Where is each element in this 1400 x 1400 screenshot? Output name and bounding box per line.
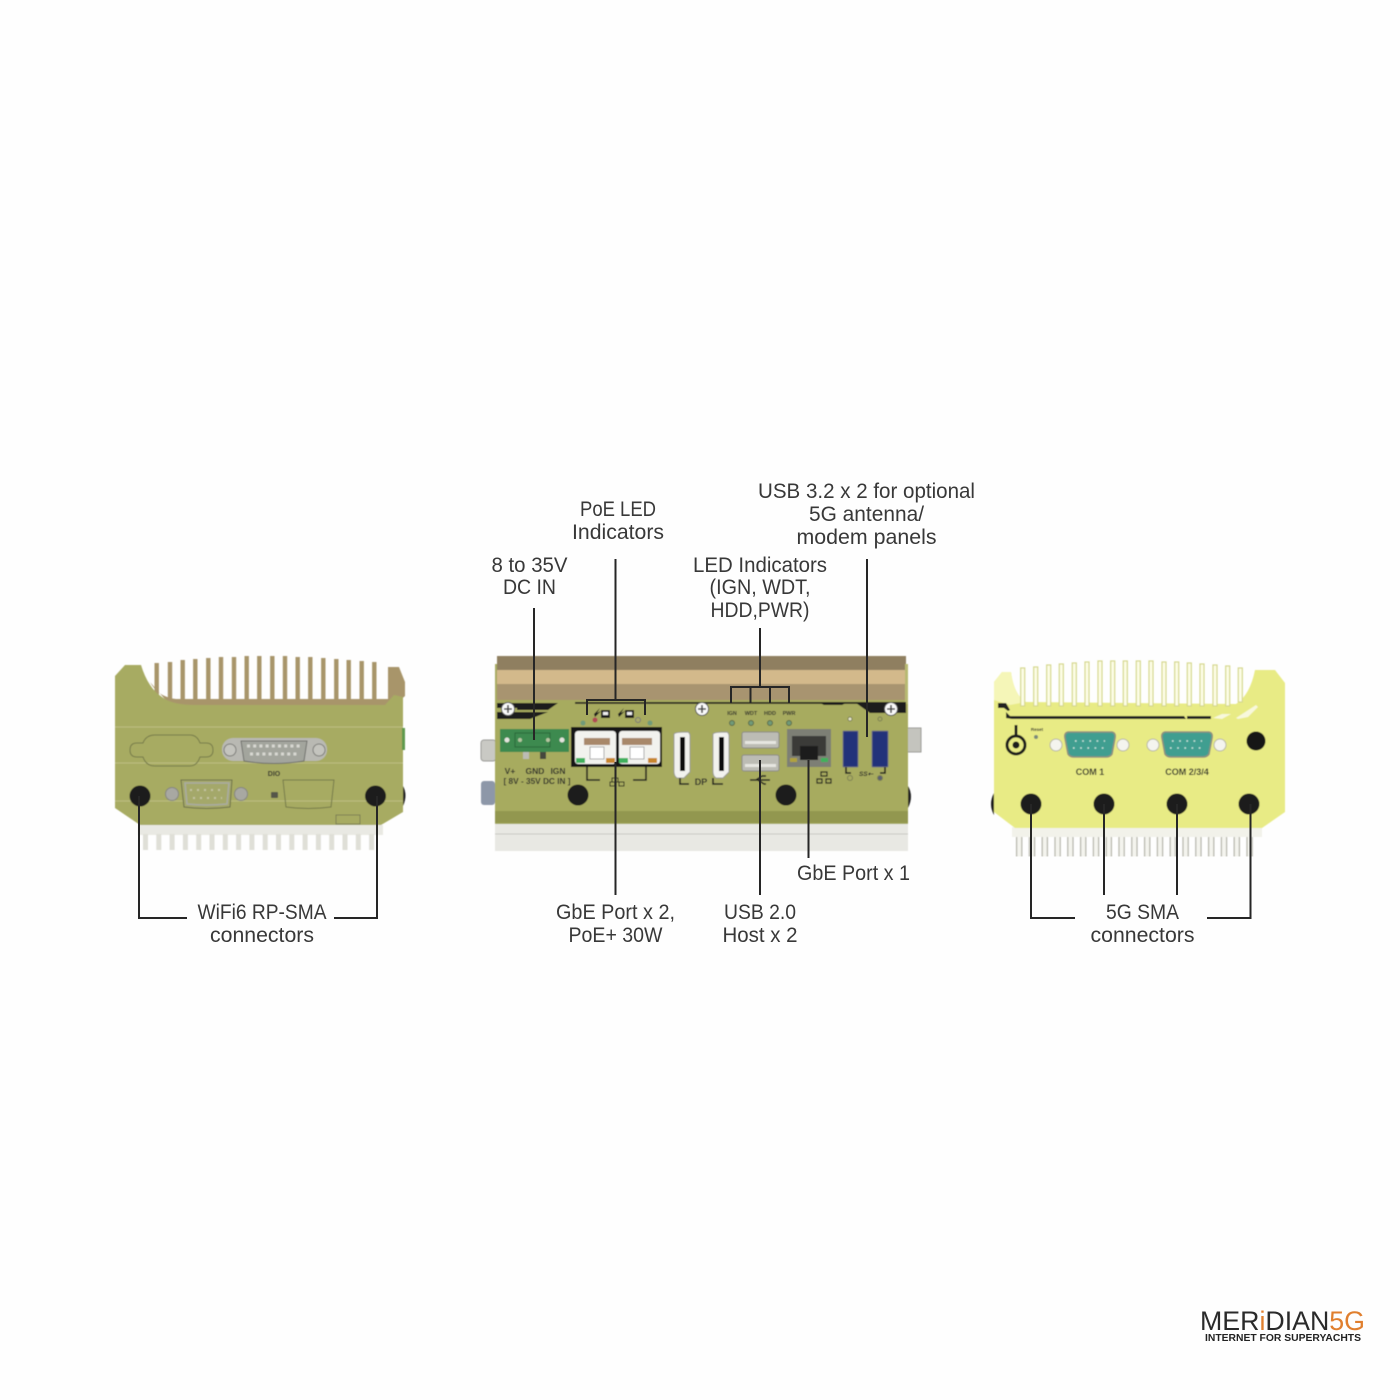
leader lines bbox=[139, 559, 1250, 918]
small switch bbox=[271, 792, 278, 798]
COM 1 label: COM 1 bbox=[1076, 767, 1104, 777]
network icon bbox=[817, 772, 831, 783]
screws bbox=[502, 702, 898, 716]
label: WiFi6 connectors: WiFi6 RP-SMA bbox=[198, 901, 326, 924]
side stubs bbox=[481, 728, 921, 808]
heat sink base and right shoulder bbox=[150, 667, 405, 705]
LED labels: PWR bbox=[783, 711, 795, 717]
top fins bbox=[1021, 661, 1242, 706]
label: LED Indicators: LED Indicators bbox=[693, 554, 827, 577]
top tan heat sink bands bbox=[497, 656, 906, 700]
DC labels: IGN bbox=[550, 766, 566, 776]
black stripe graphics bbox=[497, 702, 906, 719]
LED indicator dots bbox=[730, 720, 792, 726]
knockout: lower right serial outline bbox=[283, 780, 334, 808]
label: USB 3.2: modem panels bbox=[796, 526, 936, 549]
logo wordmark: MERiDIAN5G bbox=[1200, 1306, 1365, 1336]
knob left bbox=[568, 784, 588, 806]
center device: main I/O panel bbox=[481, 656, 921, 851]
logo bbox=[1200, 1306, 1365, 1344]
knob right bbox=[776, 784, 796, 806]
label: GbE Port x 2: PoE+ 30W bbox=[568, 924, 663, 947]
label: PoE LED Indicators: PoE LED bbox=[580, 498, 656, 521]
LED labels: IGN bbox=[727, 711, 737, 717]
antenna knob left bbox=[130, 786, 150, 806]
5G knobs bbox=[991, 793, 1260, 815]
label: USB 2.0: USB 2.0 bbox=[724, 901, 796, 924]
COM 1 connector bbox=[1050, 732, 1129, 757]
black button bbox=[1246, 732, 1266, 750]
DP bracket and label: DP bbox=[695, 777, 707, 787]
DC labels: [ 8V - 35V DC IN ] bbox=[504, 777, 571, 786]
faint body highlights bbox=[115, 727, 403, 801]
bottom fins bbox=[138, 825, 383, 842]
small slot bbox=[336, 815, 360, 824]
LED labels bbox=[727, 711, 795, 717]
dual GbE PoE ports bbox=[571, 727, 662, 767]
side knob bbox=[403, 786, 406, 806]
right device: front view with 5G connectors bbox=[991, 661, 1285, 847]
label: USB 3.2: 5G antenna/ bbox=[809, 503, 924, 526]
DC labels: V+ bbox=[505, 766, 515, 776]
DIO connector bbox=[222, 738, 327, 764]
label: DC input: DC IN bbox=[503, 576, 556, 599]
GbE port 1 bbox=[787, 729, 831, 767]
logo tagline: INTERNET FOR SUPERYACHTS bbox=[1205, 1333, 1361, 1344]
label: PoE LED Indicators: Indicators bbox=[572, 521, 664, 544]
label: DC input: 8 to 35V bbox=[492, 554, 568, 577]
USB 3.2 ports: SS⇠ bbox=[859, 771, 874, 778]
DC labels: GND bbox=[526, 766, 544, 776]
olive panel bbox=[495, 664, 908, 825]
power button icon bbox=[1007, 725, 1025, 754]
LED labels: WDT bbox=[745, 711, 758, 717]
reset label and dot bbox=[1031, 727, 1044, 739]
DIO label: DIO bbox=[268, 771, 281, 778]
USB 3.2 ports bbox=[843, 731, 888, 778]
label: LED Indicators: HDD,PWR) bbox=[710, 599, 810, 622]
body bbox=[994, 670, 1285, 828]
antenna knob right bbox=[365, 786, 386, 806]
label: WiFi6 connectors: connectors bbox=[210, 924, 314, 947]
DC labels bbox=[504, 766, 571, 786]
reset label and dot: Reset bbox=[1031, 727, 1044, 732]
bottom fins bbox=[1012, 827, 1262, 847]
small status dots bbox=[848, 717, 882, 780]
left device: rear view with WiFi6 connectors bbox=[115, 656, 406, 842]
label: 5G SMA connectors: 5G SMA bbox=[1106, 901, 1179, 924]
label: LED Indicators: (IGN, WDT, bbox=[710, 576, 810, 599]
knockout: upper serial outline bbox=[130, 735, 213, 766]
white stripe graphic bbox=[1213, 705, 1258, 719]
DisplayPort connector 1 bbox=[674, 732, 690, 778]
USB 2.0 ports bbox=[742, 732, 779, 771]
LED labels: HDD bbox=[764, 711, 776, 717]
black stripe bbox=[998, 703, 1211, 719]
pale top left highlight bbox=[994, 672, 1026, 705]
lower light band bbox=[495, 824, 908, 851]
side green terminal sliver bbox=[402, 728, 405, 750]
DP bracket and label bbox=[680, 777, 723, 787]
label: GbE Port x 1: GbE Port x 1 bbox=[797, 862, 910, 885]
body bbox=[115, 665, 403, 825]
label: 5G SMA connectors: connectors bbox=[1090, 924, 1194, 947]
heat sink fins top bbox=[157, 656, 374, 702]
COM 2/3/4 label: COM 2/3/4 bbox=[1165, 767, 1209, 777]
lower serial connector bbox=[166, 780, 248, 808]
PoE icons bbox=[594, 708, 634, 718]
PoE LED dots bbox=[580, 718, 652, 726]
COM 2/3/4 connector bbox=[1147, 732, 1226, 757]
GbE bracket and network icon bbox=[587, 767, 646, 786]
DC terminal block bbox=[500, 729, 569, 759]
label: GbE Port x 2: GbE Port x 2, bbox=[556, 901, 675, 924]
DisplayPort connector 2 bbox=[713, 732, 729, 778]
label: USB 3.2: USB 3.2 x 2 for optional bbox=[758, 480, 975, 503]
label: USB 2.0: Host x 2 bbox=[722, 924, 798, 947]
USB icon bbox=[750, 776, 770, 784]
